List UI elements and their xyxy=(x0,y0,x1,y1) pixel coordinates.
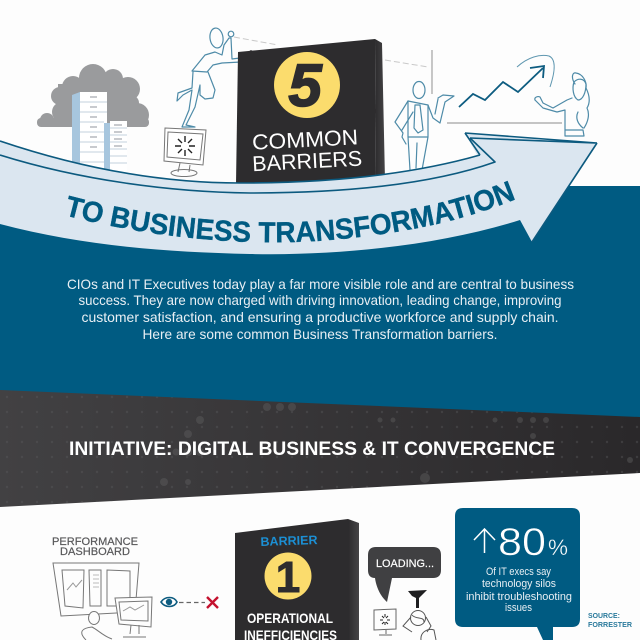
panel: teal intro background xyxy=(0,186,640,426)
ribbon title text: TO BUSINESS TRANSFORMATION xyxy=(68,180,515,242)
barrier name: OPERATIONAL xyxy=(247,610,333,626)
stat description: inhibit troubleshooting xyxy=(466,591,572,603)
barrier name xyxy=(244,610,337,640)
band heading: INITIATIVE: DIGITAL BUSINESS & IT CONVERGENCE xyxy=(69,439,555,460)
arrow ribbon xyxy=(0,132,598,254)
stat description: issues xyxy=(505,602,533,614)
performance dashboard label: DASHBOARD xyxy=(60,546,130,558)
icon: number 5 badge xyxy=(274,52,340,119)
illustration: person holding head xyxy=(403,610,436,640)
intro paragraph: CIOs and IT Executives today play a far more visible role and are central to business xyxy=(67,277,574,292)
icon: stress mark over head xyxy=(408,590,427,608)
box heading: common barriers xyxy=(251,125,363,176)
icon: marker pen in hand xyxy=(240,50,254,62)
icon: rising chart arrow xyxy=(459,55,554,107)
source note: FORRESTER xyxy=(588,620,633,629)
icon: number 1 badge: 1 xyxy=(276,553,300,602)
callout: loading speech bubble xyxy=(368,547,441,602)
illustration: dashboard wall and viewer xyxy=(53,563,152,640)
icon: small monitor xyxy=(374,609,396,635)
source note: SOURCE: xyxy=(588,611,620,620)
icon: cloud with servers xyxy=(37,64,149,176)
source note xyxy=(588,611,633,629)
callout: 80 percent stat xyxy=(455,508,580,640)
stat description xyxy=(466,566,572,614)
performance dashboard label: PERFORMANCE xyxy=(52,536,138,548)
illustration: man climbing the box xyxy=(177,27,241,127)
illustration: presenter xyxy=(395,82,454,170)
stat number xyxy=(474,521,568,564)
stat description: technology silos xyxy=(482,578,557,590)
icon: eye with dashed line to red cross xyxy=(161,597,218,608)
icon: number 5 badge: 5 xyxy=(288,52,323,119)
dashed sight line right xyxy=(385,60,428,67)
box heading: common barriers: COMMON xyxy=(252,125,359,155)
intro paragraph: success. They are now charged with driving innovation, leading change, improving xyxy=(78,293,562,308)
box heading: common barriers: BARRIERS xyxy=(252,147,363,176)
performance dashboard label xyxy=(52,536,138,558)
whiteboard lines xyxy=(432,50,562,123)
intro paragraph: customer satisfaction, and ensuring a productive workforce and supply chain. xyxy=(82,310,558,325)
intro paragraph xyxy=(67,277,574,342)
stat number: % xyxy=(548,535,568,560)
panel: barrier box xyxy=(236,39,385,184)
dashed sight line left xyxy=(234,37,278,45)
icon: monitor with spinner xyxy=(164,128,206,176)
illustration: woman presenter xyxy=(535,73,589,136)
intro paragraph: Here are some common Business Transformation barriers. xyxy=(142,327,498,342)
callout: loading speech bubble: LOADING... xyxy=(376,558,434,570)
stat number: 80 xyxy=(498,521,546,564)
panel: initiative dark band xyxy=(0,390,640,507)
barrier label: BARRIER xyxy=(260,533,318,549)
panel: barrier 1 box xyxy=(235,519,359,640)
stat description: Of IT execs say xyxy=(486,566,552,578)
